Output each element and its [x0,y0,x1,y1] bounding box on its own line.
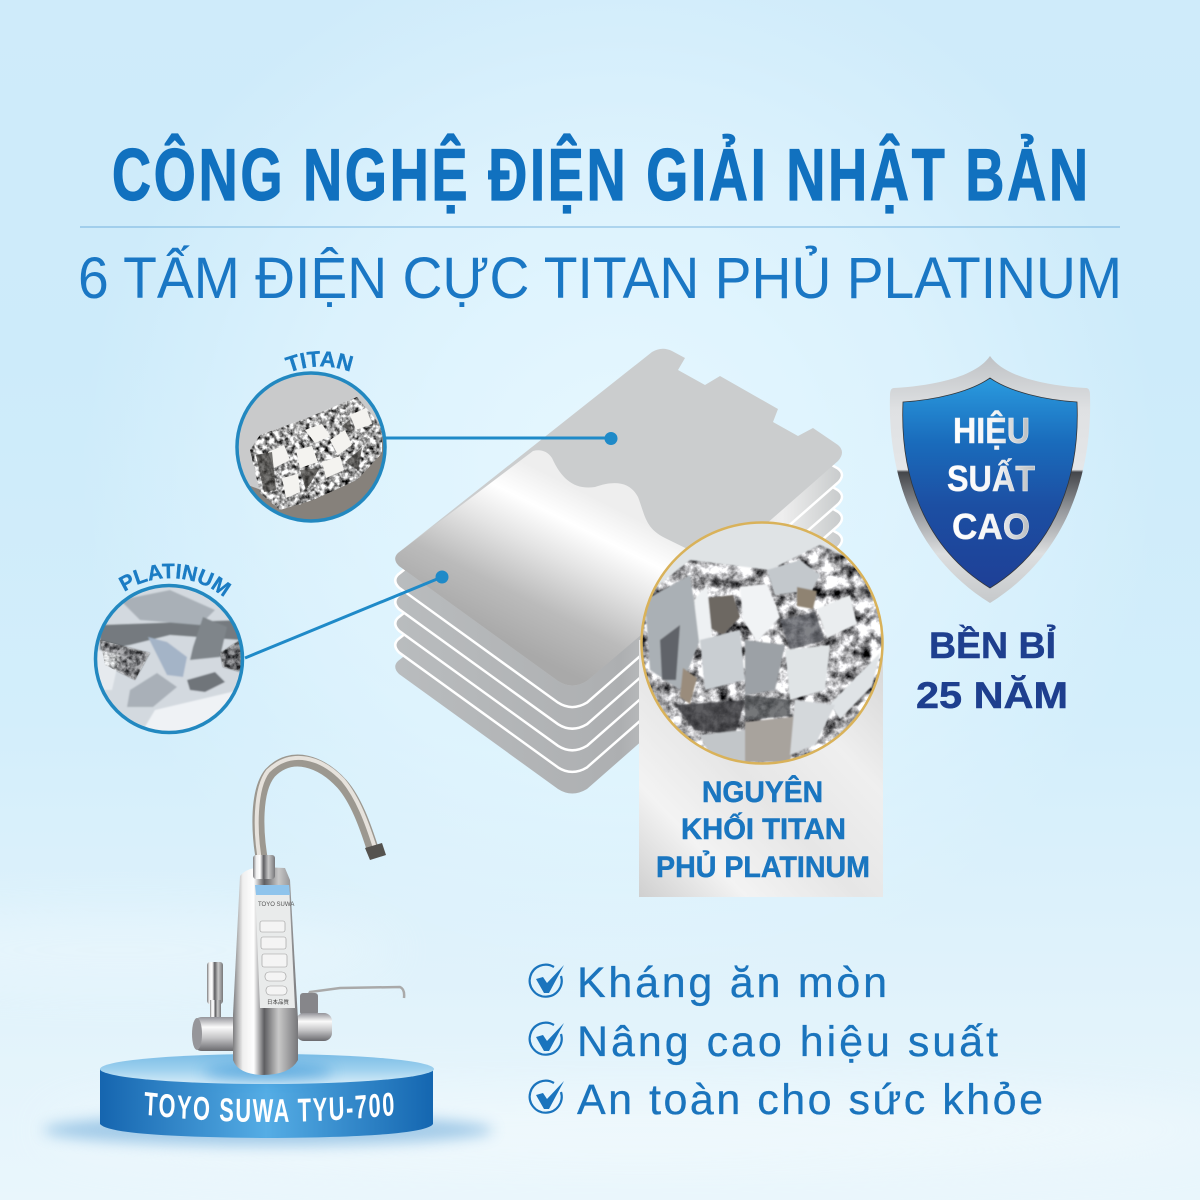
durability text: 25 NĂM [916,675,1068,716]
left handle [192,962,248,1051]
shield badge: CAO [952,506,1030,547]
platinum label: PLATINUM [118,564,232,597]
durability text: BỀN BỈ [929,625,1056,666]
check item 2: Nâng cao hiệu suất [577,1018,998,1066]
electrode plate stack [395,349,842,794]
faucet body [233,867,298,1075]
titanium platinum sample circle [640,520,885,765]
platinum callout line [245,570,448,658]
control panel [255,885,295,1008]
panel caption [656,775,870,884]
right outlet [296,987,404,1041]
silver panel [639,640,883,897]
lower plates [395,371,842,794]
titan sample circle [235,370,390,525]
titan label: TITAN [284,350,354,372]
shield badge: SUẤT [947,458,1035,499]
panel caption: PHỦ PLATINUM [656,850,870,884]
faucet [192,758,404,1075]
control panel: TOYO SUWA [258,902,294,908]
shield badge [890,356,1090,603]
neck collar [253,855,275,879]
check item 3: An toàn cho sức khỏe [577,1076,1043,1124]
title: CÔNG NGHỆ ĐIỆN GIẢI NHẬT BẢN [112,133,1088,216]
durability text [916,625,1068,716]
product platform [43,1054,493,1146]
checklist [530,959,1043,1124]
platinum coating [395,450,722,686]
check item 1: Kháng ăn mòn [577,959,887,1007]
faucet nozzle [365,843,386,860]
titanium back plate [395,349,842,686]
panel caption: KHỐI TITAN [681,812,846,846]
subtitle: 6 TẤM ĐIỆN CỰC TITAN PHỦ PLATINUM [78,246,1122,311]
control panel: 日本品質 [267,998,290,1006]
titan callout line [386,432,618,445]
platinum sample circle [94,584,244,734]
panel caption: NGUYÊN [702,775,823,809]
faucet neck [257,758,375,866]
model name: TOYO SUWA TYU-700 [144,1092,394,1122]
shield badge: HIỆU [953,409,1030,451]
